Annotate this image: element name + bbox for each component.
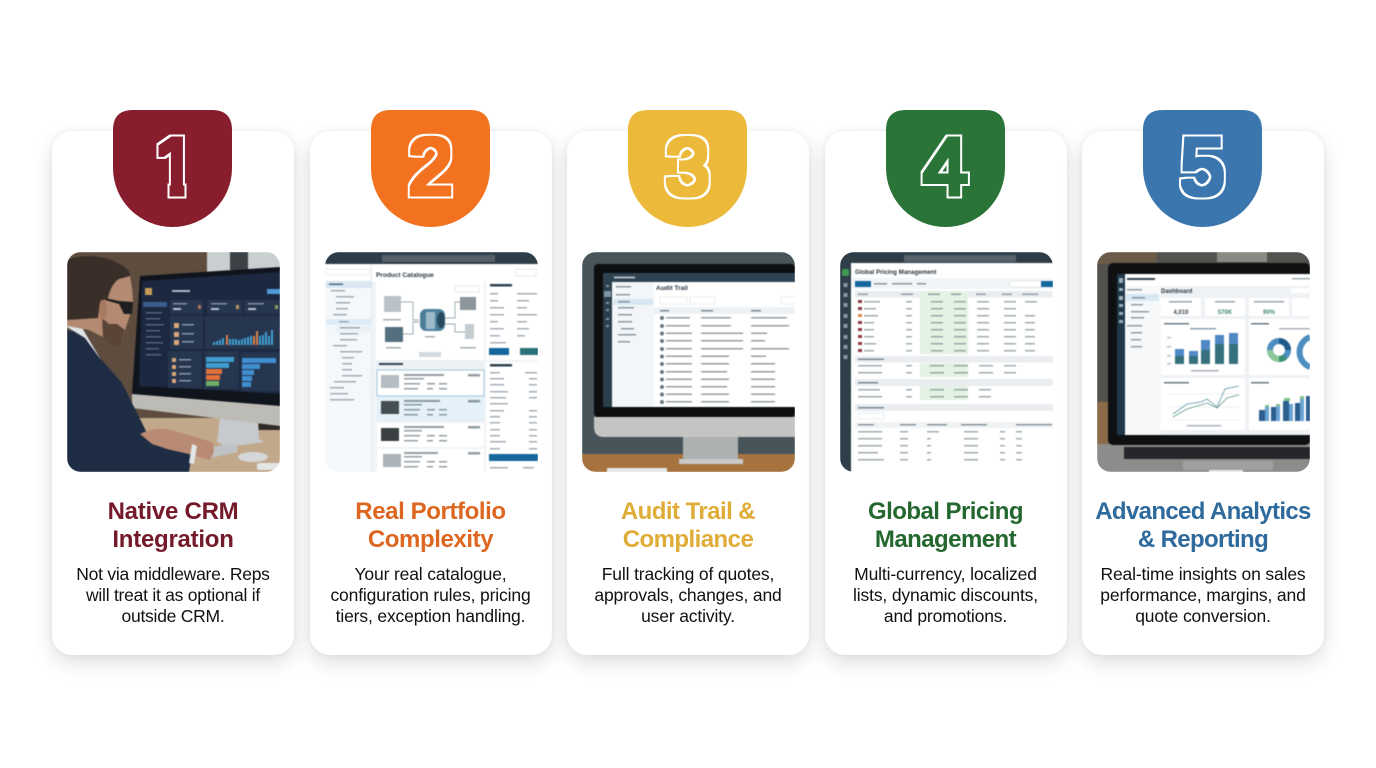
text: audit trail description: Full tracking of quotes, (602, 564, 774, 584)
text: native CRM description (76, 564, 270, 626)
text: audit trail description (594, 564, 782, 626)
heading: advanced analytics and reporting (1095, 498, 1311, 553)
heading: native CRM integration (108, 498, 238, 553)
text: advanced analytics description (1100, 564, 1306, 626)
text: real portfolio description: Your real catalogue, (354, 564, 507, 584)
icon: number badge 2 (371, 110, 490, 227)
heading: advanced analytics and reporting: & Reporting (1138, 526, 1268, 553)
text: native CRM description: Not via middleware. Reps (76, 564, 270, 584)
image: product catalogue screen (325, 252, 538, 472)
heading: global pricing management (868, 498, 1023, 553)
text: global pricing description: Multi-currency, localized (854, 564, 1037, 584)
text: advanced analytics description: performance, margins, and (1100, 585, 1306, 605)
heading: real portfolio complexity (355, 498, 506, 553)
heading: native CRM integration: Native CRM (108, 498, 238, 525)
icon: number badge 2: 2 (408, 122, 452, 211)
text: real portfolio description: tiers, exception handling. (336, 606, 525, 626)
heading: audit trail and compliance (621, 498, 755, 553)
text: global pricing description: and promotions. (884, 606, 1007, 626)
image: analytics dashboard on laptop: 4,010 (1173, 310, 1189, 316)
panel: card 4 global pricing management (819, 110, 1073, 669)
text: real portfolio description: configuration rules, pricing (330, 585, 531, 605)
heading: advanced analytics and reporting: Advanced Analytics (1095, 498, 1311, 525)
icon: number badge 1 (113, 110, 232, 227)
image: audit trail screen on desktop monitor (582, 252, 795, 472)
icon: number badge 4 (886, 110, 1005, 227)
heading: global pricing management: Management (875, 526, 1016, 553)
image: analytics dashboard on laptop (1097, 252, 1310, 472)
image: analytics dashboard on laptop: Dashboard (1161, 289, 1193, 295)
panel: card 1 native CRM integration (46, 110, 300, 669)
heading: audit trail and compliance: Audit Trail & (621, 498, 755, 525)
icon: number badge 4: 4 (923, 122, 967, 211)
text: global pricing description: lists, dynamic discounts, (853, 585, 1038, 605)
text: real portfolio description (330, 564, 531, 626)
panel: card 2 real portfolio complexity (304, 110, 558, 669)
text: advanced analytics description: quote conversion. (1135, 606, 1271, 626)
image: analytics dashboard on laptop: 570K (1218, 310, 1233, 316)
heading: native CRM integration: Integration (112, 526, 234, 553)
heading: real portfolio complexity: Real Portfolio (355, 498, 506, 525)
text: audit trail description: approvals, changes, and (594, 585, 782, 605)
icon: number badge 3 (628, 110, 747, 227)
icon: number badge 5: 5 (1180, 122, 1225, 211)
image: global pricing management table (840, 252, 1053, 472)
text: advanced analytics description: Real-time insights on sales (1100, 564, 1306, 584)
heading: real portfolio complexity: Complexity (368, 526, 493, 553)
icon: number badge 5 (1143, 110, 1262, 227)
image: analyst at dark CRM dashboard (67, 252, 280, 472)
heading: audit trail and compliance: Compliance (623, 526, 753, 553)
icon: number badge 3: 3 (665, 122, 710, 211)
panel: card 3 audit trail and compliance (561, 110, 815, 669)
image: analytics dashboard on laptop: 90% (1263, 310, 1276, 316)
heading: global pricing management: Global Pricing (868, 498, 1023, 525)
text: global pricing description (853, 564, 1038, 626)
text: native CRM description: will treat it as optional if (86, 585, 260, 605)
text: audit trail description: user activity. (641, 606, 735, 626)
panel: card 5 advanced analytics and reporting (1076, 110, 1330, 669)
image: product catalogue screen: Product Catalogue (376, 272, 434, 279)
text: native CRM description: outside CRM. (121, 606, 224, 626)
icon: number badge 1: 1 (153, 122, 198, 211)
image: global pricing management table: Global Pricing Management (854, 269, 936, 276)
image: audit trail screen on desktop monitor: Audit Trail (656, 285, 688, 292)
